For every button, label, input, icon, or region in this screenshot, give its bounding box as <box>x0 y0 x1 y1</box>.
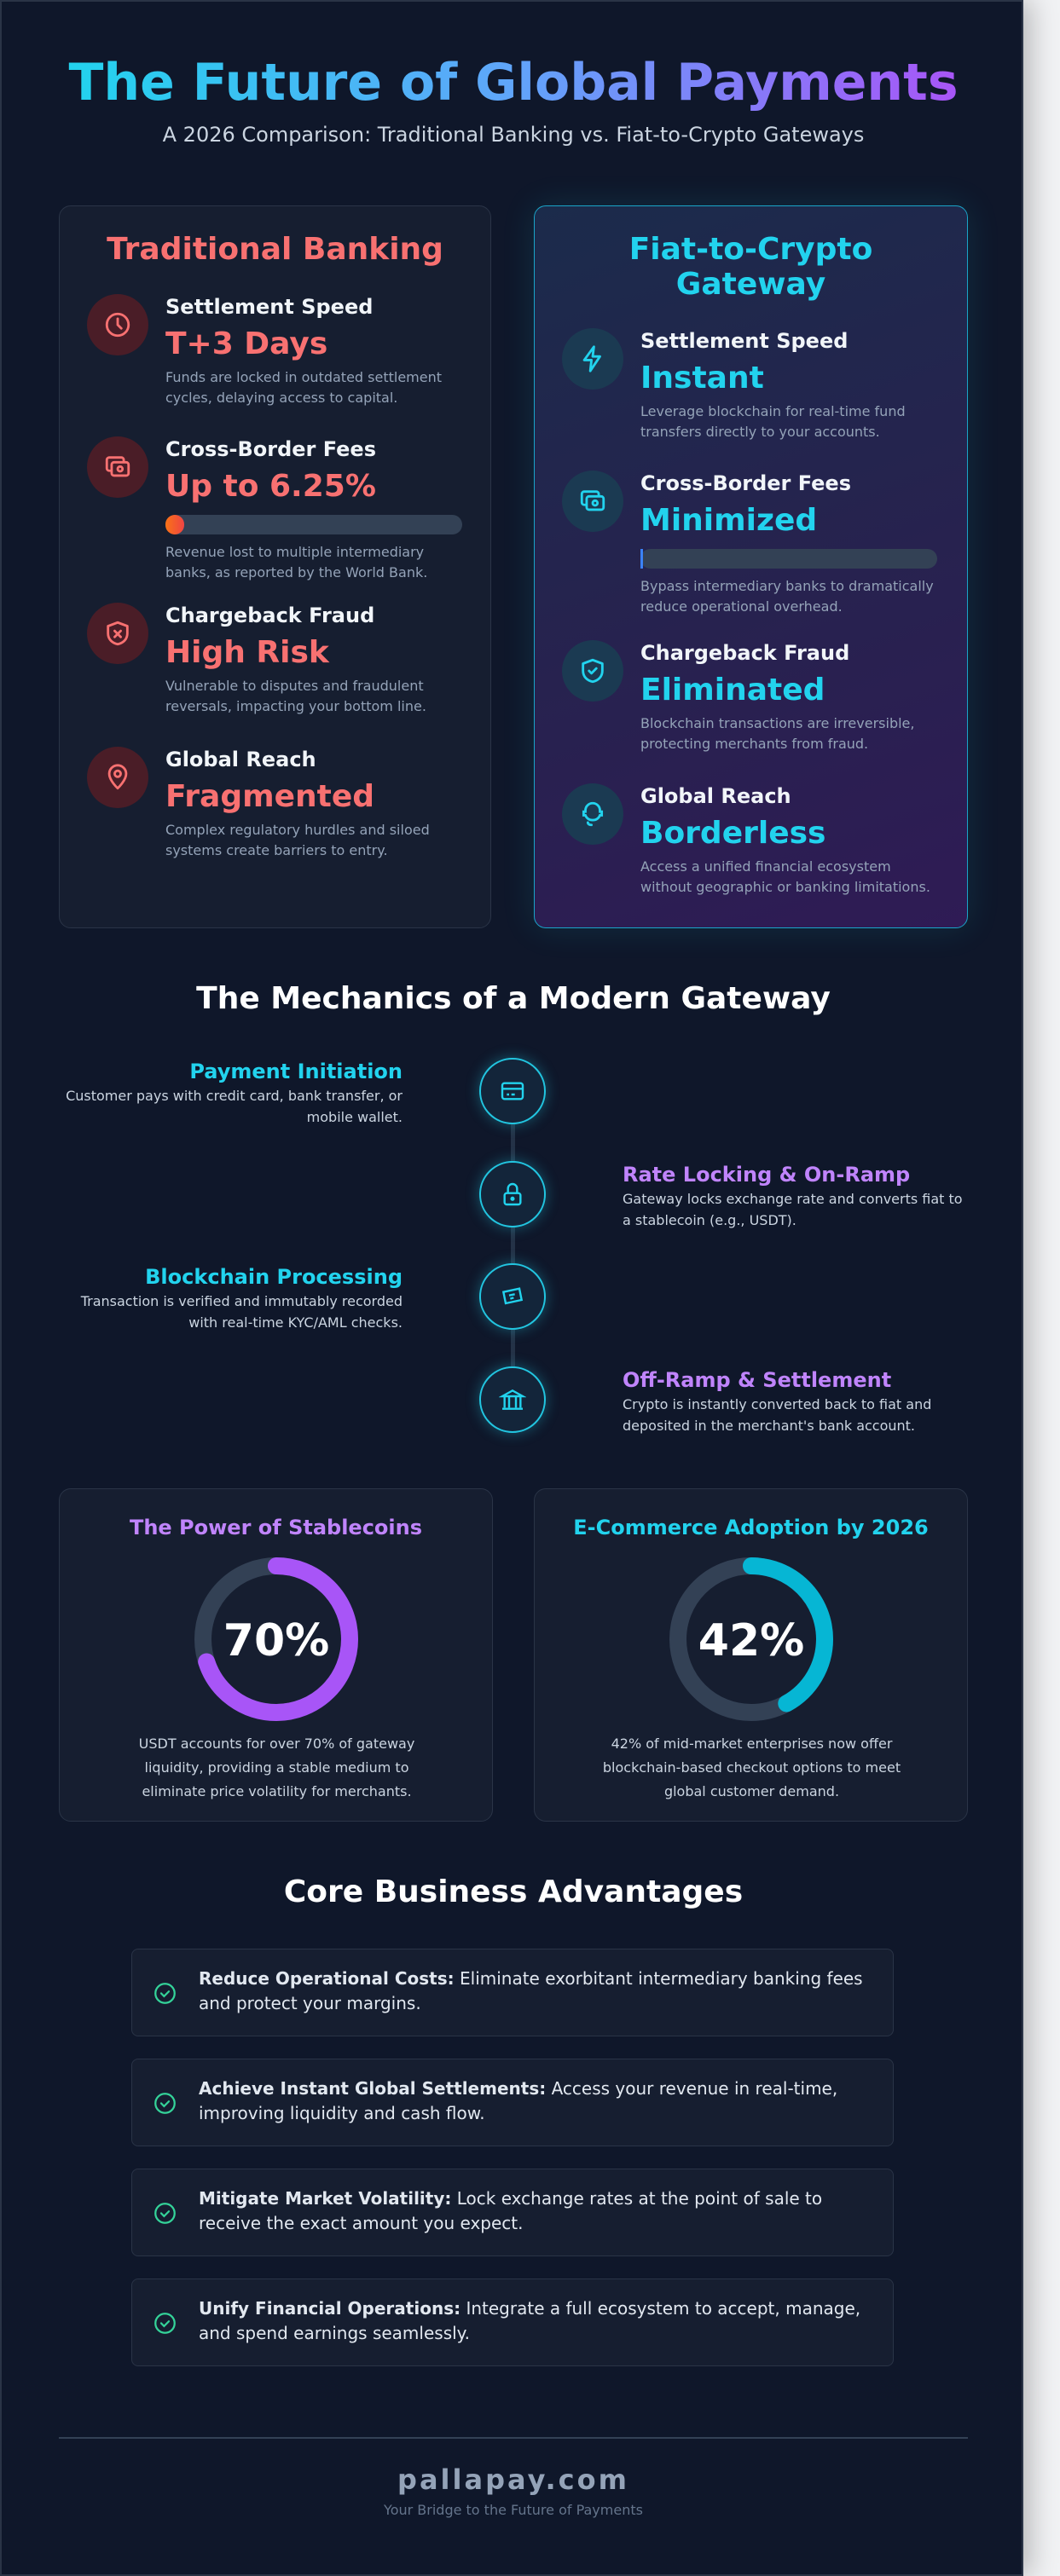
item: global reach: Fragmented <box>165 779 374 814</box>
item: chargeback fraud: Eliminated <box>640 673 825 708</box>
donut chart: 42%: 42% <box>698 1615 804 1666</box>
step 1 icon: card <box>479 1058 546 1124</box>
item: global reach: Global Reach <box>165 748 316 771</box>
item: cross-border fees <box>87 436 462 580</box>
item: cross-border fees: Cross-Border Fees <box>165 437 376 461</box>
icon: money <box>87 436 148 498</box>
item: cross-border fees: Up to 6.25% <box>165 469 376 504</box>
icon: money <box>562 471 623 532</box>
item: cross-border fees: Minimized <box>640 503 817 538</box>
benefit 2: Achieve Instant Global Settlements: Access your revenue in real-time, improving liquidity and cash flow. <box>199 2078 837 2123</box>
item: settlement speed: Settlement Speed <box>165 295 373 319</box>
step 3 text: with real-time KYC/AML checks. <box>188 1314 403 1331</box>
bar: fees <box>165 515 462 534</box>
item: cross-border fees: Bypass intermediary banks to dramatically <box>640 578 934 594</box>
item: chargeback fraud: Chargeback Fraud <box>640 641 849 665</box>
item: global reach: systems create barriers to entry. <box>165 842 388 858</box>
item: cross-border fees <box>562 471 937 615</box>
item: global reach: Complex regulatory hurdles and siloed <box>165 822 430 838</box>
step 4 icon: bank <box>479 1366 546 1433</box>
item: settlement speed <box>562 328 906 440</box>
item: settlement speed: Settlement Speed <box>640 329 848 353</box>
step 3 text <box>80 1265 403 1331</box>
step 1 text: Payment Initiation <box>189 1060 403 1083</box>
item: cross-border fees: Revenue lost to multiple intermediary <box>165 544 424 560</box>
item: settlement speed <box>87 294 442 406</box>
heading: mechanics: The Mechanics of a Modern Gateway <box>196 981 831 1016</box>
item: cross-border fees: Cross-Border Fees <box>640 471 851 495</box>
item: settlement speed: Leverage blockchain for real-time fund <box>640 403 906 419</box>
heading: E-Commerce Adoption by 2026 <box>573 1516 929 1539</box>
description <box>603 1736 901 1799</box>
item: chargeback fraud: High Risk <box>165 635 329 670</box>
footer tagline: Your Bridge to the Future of Payments <box>384 2502 643 2518</box>
heading: gateway <box>629 232 872 302</box>
step 3 text: Blockchain Processing <box>145 1265 403 1289</box>
item: global reach: without geographic or banking limitations. <box>640 879 930 895</box>
item: cross-border fees: reduce operational overhead. <box>640 598 843 615</box>
item: global reach: Access a unified financial ecosystem <box>640 858 891 875</box>
item: settlement speed: Instant <box>640 361 764 396</box>
donut chart: 42% <box>669 1557 833 1721</box>
donut chart: 70% <box>194 1557 358 1721</box>
item: chargeback fraud <box>87 603 426 714</box>
item: settlement speed: Funds are locked in outdated settlement <box>165 369 442 385</box>
title: The Future of Global Payments <box>68 53 959 113</box>
step 1 text <box>66 1060 403 1125</box>
item: chargeback fraud: Chargeback Fraud <box>165 604 374 627</box>
icon: globe <box>562 783 623 845</box>
benefit 3: Mitigate Market Volatility: Lock exchange rates at the point of sale to receive the exact amount you expect. <box>199 2188 822 2233</box>
bar: fees <box>640 549 937 569</box>
item: global reach <box>562 783 930 895</box>
heading: gateway: Fiat-to-Crypto <box>629 232 872 267</box>
icon: location pin <box>87 747 148 808</box>
step 4 text: Off-Ramp & Settlement <box>623 1368 891 1392</box>
description <box>139 1736 414 1799</box>
step 2 text <box>623 1163 963 1228</box>
item: settlement speed: T+3 Days <box>165 326 327 361</box>
heading: The Power of Stablecoins <box>130 1516 422 1539</box>
heading: core advantages: Core Business Advantages <box>284 1874 743 1909</box>
item: chargeback fraud: protecting merchants from fraud. <box>640 736 868 752</box>
item: global reach <box>87 747 430 858</box>
benefit 4 <box>131 2279 894 2366</box>
icon: clock <box>87 294 148 355</box>
icon: shield x <box>87 603 148 664</box>
step 3 text: Transaction is verified and immutably recorded <box>81 1293 403 1309</box>
item: settlement speed: transfers directly to your accounts. <box>640 424 880 440</box>
benefit 1 <box>131 1949 894 2036</box>
step 1 text: Customer pays with credit card, bank transfer, or <box>66 1088 403 1104</box>
icon: lightning <box>562 328 623 390</box>
subtitle: A 2026 Comparison: Traditional Banking vs. Fiat-to-Crypto Gateways <box>163 123 864 147</box>
item: global reach: Global Reach <box>640 784 791 808</box>
donut chart: 70%: 70% <box>223 1615 329 1666</box>
step 2 text: Rate Locking & On-Ramp <box>623 1163 910 1187</box>
description: blockchain-based checkout options to meet <box>603 1759 901 1776</box>
step 3 icon: ticket <box>479 1263 546 1330</box>
step 4 text: deposited in the merchant's bank account. <box>623 1418 915 1434</box>
step 4 text: Crypto is instantly converted back to fiat and <box>623 1396 931 1412</box>
heading: gateway: Gateway <box>676 267 825 302</box>
panel: adoption stat <box>534 1488 968 1822</box>
item: chargeback fraud: reversals, impacting your bottom line. <box>165 698 426 714</box>
item: cross-border fees: banks, as reported by the World Bank. <box>165 564 427 580</box>
item: settlement speed: cycles, delaying access to capital. <box>165 390 397 406</box>
step 2 icon: lock <box>479 1161 546 1227</box>
benefit 3 <box>131 2169 894 2256</box>
step 1 text: mobile wallet. <box>307 1109 403 1125</box>
benefit 4: Unify Financial Operations: Integrate a full ecosystem to accept, manage, and spend earnings seamlessly. <box>199 2298 860 2343</box>
timeline <box>66 1051 963 1440</box>
panel: stablecoins stat <box>59 1488 493 1822</box>
description: eliminate price volatility for merchants. <box>142 1783 412 1799</box>
benefit 1: Reduce Operational Costs: Eliminate exorbitant intermediary banking fees and protect your margins. <box>199 1968 863 2013</box>
description: 42% of mid-market enterprises now offer <box>611 1736 892 1752</box>
item: global reach: Borderless <box>640 816 825 851</box>
icon: shield check <box>562 640 623 702</box>
benefit 2 <box>131 2059 894 2146</box>
description: global customer demand. <box>664 1783 839 1799</box>
description: USDT accounts for over 70% of gateway <box>139 1736 414 1752</box>
description: liquidity, providing a stable medium to <box>145 1759 408 1776</box>
step 2 text: a stablecoin (e.g., USDT). <box>623 1212 796 1228</box>
step 4 text <box>623 1368 931 1434</box>
footer brand: pallapay.com <box>397 2463 629 2496</box>
panel: fiat-to-crypto gateway <box>534 205 968 928</box>
item: chargeback fraud: Blockchain transactions are irreversible, <box>640 715 914 731</box>
panel: traditional banking <box>59 205 491 928</box>
heading: traditional banking: Traditional Banking <box>107 232 443 267</box>
item: chargeback fraud <box>562 640 914 752</box>
item: chargeback fraud: Vulnerable to disputes and fraudulent <box>165 678 424 694</box>
step 2 text: Gateway locks exchange rate and converts fiat to <box>623 1191 963 1207</box>
